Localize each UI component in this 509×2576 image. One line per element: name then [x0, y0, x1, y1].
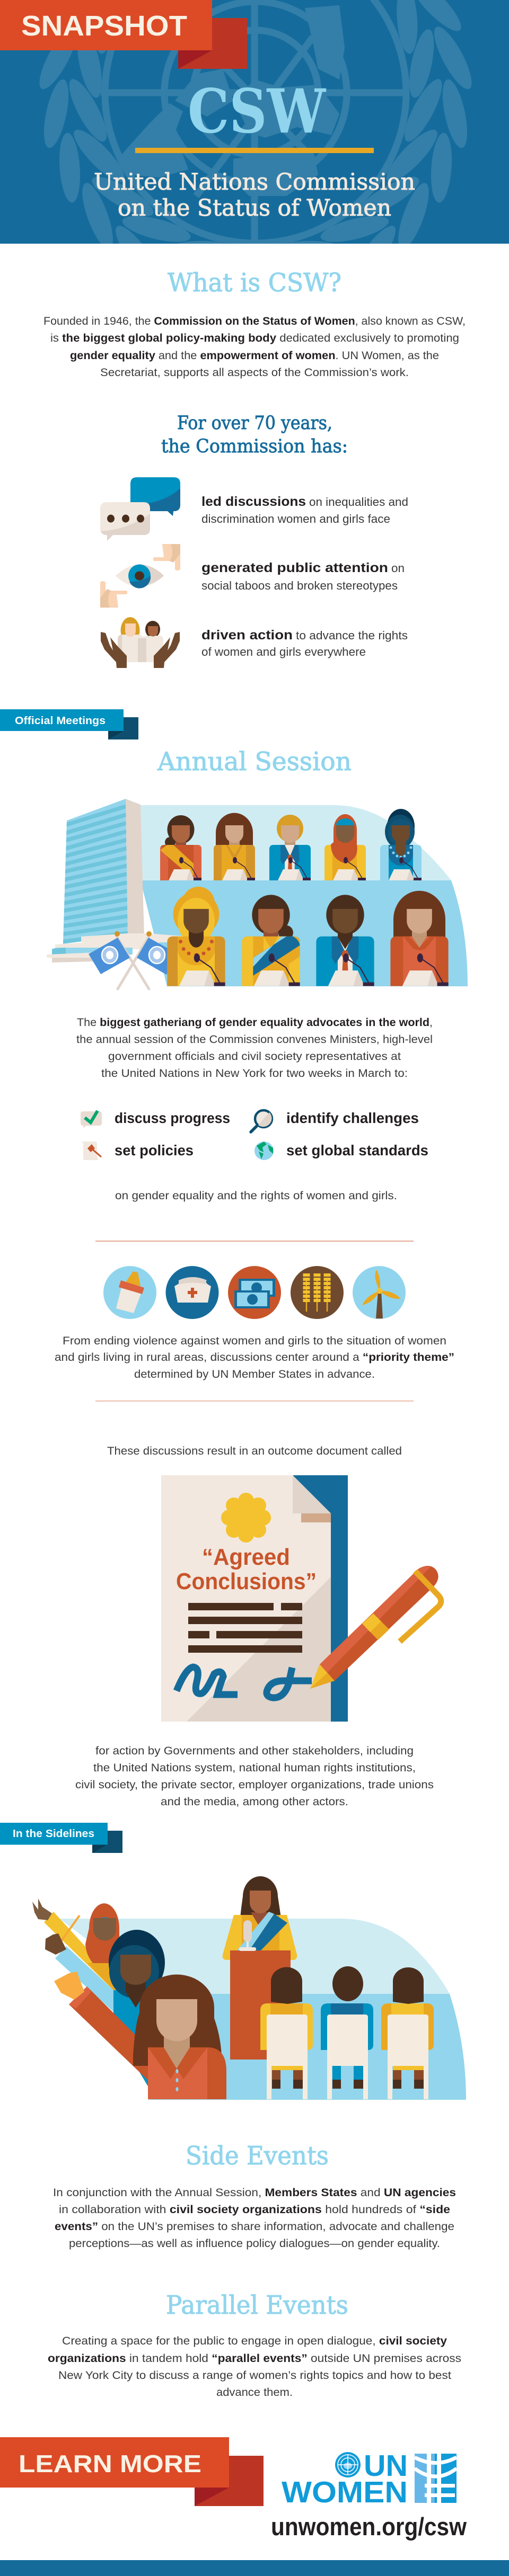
document title: Conclusions”	[176, 1568, 317, 1594]
document text lines	[188, 1603, 302, 1653]
text: side events: In conjunction with the Annual Session, Members States and UN agencies	[53, 2187, 456, 2199]
link: unwomen.org/csw: unwomen.org/csw	[271, 2512, 467, 2541]
text: annual session description: The biggest gatheriang of gender equality advocates in the world ,	[77, 1017, 433, 1029]
text: priority theme: and girls living in rural areas, discussions center around a “priority theme”	[55, 1351, 454, 1363]
icon: baby bottle	[103, 1266, 156, 1319]
heading: What is CSW?: What is CSW?	[168, 268, 341, 298]
text: driven action: of women and girls everywhere	[201, 645, 366, 658]
delegate: top row 5	[380, 809, 422, 880]
text: outcome document intro: These discussions result in an outcome document called	[107, 1445, 402, 1457]
heading: For over 70 years: For over 70 years,	[177, 413, 332, 434]
text: generated public attention	[201, 560, 405, 592]
text: annual session description: the annual session of the Commission convenes Ministers, high-level	[76, 1033, 433, 1046]
text: parallel events: advance them.	[216, 2386, 293, 2399]
text: led discussions: on inequalities and	[309, 495, 408, 509]
text: priority theme	[55, 1335, 454, 1380]
delegate: top row 3	[269, 815, 311, 880]
icon: gavel on scroll	[81, 1142, 101, 1160]
text: for action: and the media, among other actors.	[161, 1796, 348, 1808]
text: generated public attention: generated public attention	[201, 560, 388, 575]
text: for action: the United Nations system, national human rights institutions,	[93, 1762, 416, 1774]
icon: women held in hands	[101, 617, 180, 668]
woman with raised fist	[54, 1972, 226, 2099]
text: side events: in collaboration with civil society organizations hold hundreds of “side	[59, 2204, 450, 2216]
delegate: top row 4	[324, 814, 366, 880]
delegate: bottom row 2	[242, 895, 300, 986]
text: CSW introduction: Founded in 1946, the Commission on the Status of Women , also known as CSW,	[43, 315, 466, 327]
ribbon: snapshot: SNAPSHOT	[21, 10, 187, 42]
text: CSW introduction	[43, 315, 466, 379]
ribbon: Official Meetings: Official Meetings	[15, 715, 106, 727]
delegate: top row 1	[160, 815, 201, 880]
text: parallel events: Creating a space for the public to engage in open dialogue, civil society	[62, 2335, 447, 2347]
text: priority theme: determined by UN Member States in advance.	[134, 1368, 375, 1380]
label: set policies: set policies	[115, 1142, 194, 1158]
label: identify challenges: identify challenges	[286, 1110, 419, 1126]
subtitle: on the Status of Women	[118, 195, 391, 221]
subtitle	[94, 169, 415, 221]
text: CSW introduction: Secretariat, supports all aspects of the Commission’s work.	[100, 367, 409, 379]
seal	[221, 1493, 271, 1543]
signature	[177, 1667, 312, 1698]
ribbon: In the Sidelines	[0, 1823, 122, 1853]
icon: speech bubbles	[100, 477, 180, 541]
list: session goals	[81, 1110, 428, 1160]
delegate: bottom row 1	[167, 887, 225, 986]
ribbon: Learn More: LEARN MORE	[19, 2450, 201, 2477]
text: parallel events	[48, 2335, 461, 2399]
text: side events	[53, 2187, 456, 2250]
delegate: top row 2	[214, 813, 255, 880]
ribbon: In the Sidelines: In the Sidelines	[13, 1828, 94, 1840]
gold divider	[135, 148, 374, 153]
text: for action: for action by Governments and other stakeholders, including	[95, 1745, 414, 1757]
logo: UN Women	[282, 2449, 457, 2509]
icon: check bubble	[81, 1111, 102, 1128]
text: CSW introduction: gender equality and the empowerment of women . UN Women, as the	[70, 350, 439, 362]
UN emblem	[335, 2452, 361, 2477]
backdrop panels	[59, 1919, 466, 2100]
icon: banknotes	[228, 1266, 281, 1319]
text: parallel events: New York City to discuss a range of women’s rights topics and how to best	[58, 2369, 451, 2382]
icon: nurse cap	[165, 1266, 218, 1319]
label: discuss progress: discuss progress	[115, 1110, 230, 1126]
delegate: bottom row 4	[390, 891, 449, 986]
crossed UN flags	[89, 931, 178, 989]
text: led discussions	[201, 494, 408, 525]
label: set global standards: set global standards	[286, 1142, 428, 1158]
speaker at podium	[223, 1876, 297, 2060]
text: for action: civil society, the private sector, employer organizations, trade unions	[75, 1779, 434, 1791]
audience member 2	[321, 1966, 373, 2099]
icon: magnifier	[251, 1110, 272, 1132]
text: driven action: to advance the rights	[296, 629, 408, 642]
title: CSW: CSW	[188, 76, 327, 147]
text: on gender equality: on gender equality and the rights of women and girls.	[115, 1190, 397, 1202]
pen	[310, 1566, 441, 1689]
icon: globe	[254, 1142, 274, 1160]
text: CSW introduction: is the biggest global policy-making body dedicated exclusively to promoting	[50, 332, 459, 344]
ribbon: snapshot	[0, 0, 247, 69]
delegate: bottom row 3	[316, 895, 374, 986]
text: led discussions: discrimination women and girls face	[201, 512, 390, 525]
ribbon: Learn More	[0, 2437, 264, 2506]
illustration: Agreed Conclusions document	[161, 1475, 441, 1722]
text: driven action: driven action	[201, 628, 293, 643]
document	[161, 1475, 348, 1722]
text: annual session description: the United Nations in New York for two weeks in March to:	[101, 1067, 408, 1080]
document title	[176, 1544, 317, 1594]
UN Women symbol	[415, 2454, 457, 2503]
heading: For over 70 years	[161, 413, 348, 457]
heading: For over 70 years: the Commission has:	[161, 436, 348, 457]
text: annual session description: government officials and civil society representatives at	[108, 1050, 401, 1063]
document title: “Agreed	[202, 1544, 290, 1570]
illustration: annual session	[47, 799, 468, 989]
logo wordmark	[282, 2449, 408, 2509]
UN headquarters building	[47, 799, 188, 962]
panel: header	[0, 0, 509, 244]
subtitle: United Nations Commission	[94, 169, 415, 195]
footer bar	[0, 2560, 509, 2576]
heading: Side Events: Side Events	[186, 2141, 329, 2171]
text: generated public attention: social taboos and broken stereotypes	[201, 579, 398, 592]
woman in hijab	[32, 1898, 125, 1990]
text: annual session description	[76, 1017, 433, 1080]
logo wordmark: UN	[364, 2449, 408, 2483]
text: priority theme: From ending violence against women and girls to the situation of women	[63, 1335, 446, 1347]
text: for action	[75, 1745, 434, 1808]
UN emblem watermark	[39, 0, 472, 244]
icon: wind turbine	[353, 1266, 406, 1319]
seated audience	[260, 1966, 434, 2099]
icon: wheat	[291, 1266, 344, 1319]
heading: Parallel Events: Parallel Events	[166, 2290, 348, 2320]
text: driven action	[201, 628, 408, 658]
text: side events: events” on the UN’s premises to share information, advocate and challenge	[55, 2221, 454, 2233]
audience member 1	[260, 1967, 313, 2099]
audience member 3	[381, 1967, 434, 2099]
woman with headwrap	[45, 1915, 165, 2087]
backdrop panels	[139, 805, 468, 986]
text: side events: perceptions—as well as influence policy dialogues—on gender equality.	[69, 2238, 440, 2250]
heading: Annual Session: Annual Session	[157, 747, 352, 777]
text: led discussions: led discussions	[201, 494, 306, 509]
illustration: sidelines	[32, 1876, 466, 2100]
raised arms group	[32, 1898, 226, 2099]
icon: eye framed by hands	[100, 544, 180, 608]
ribbon: Official Meetings	[0, 709, 138, 739]
logo wordmark: WOMEN	[282, 2475, 408, 2509]
text: parallel events: organizations in tandem hold “parallel events” outside UN premises across	[48, 2352, 461, 2365]
text: generated public attention: on	[391, 561, 405, 575]
